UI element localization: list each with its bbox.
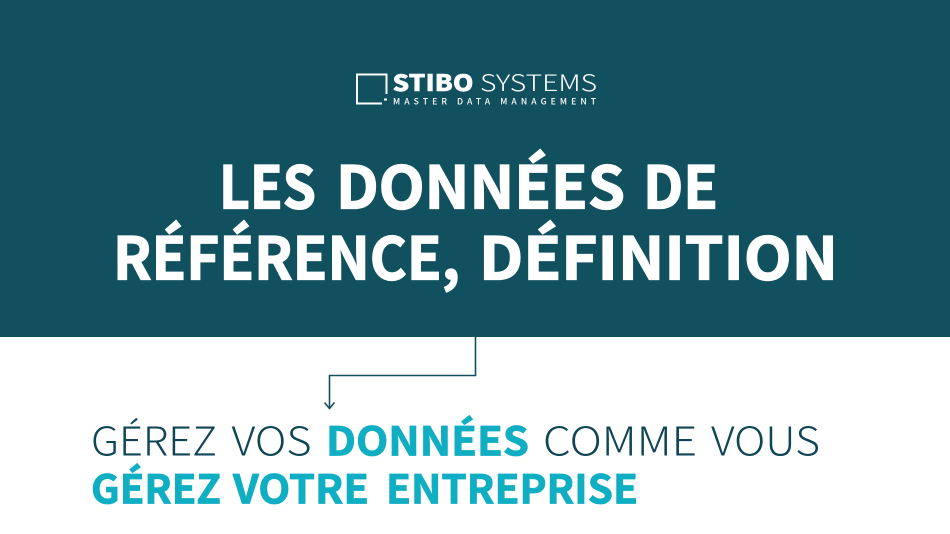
- subtitle line 1: GÉREZ: [91, 410, 217, 468]
- title: [113, 140, 838, 297]
- subtitle line 1: VOS: [232, 410, 312, 468]
- logo: Stibo Systems: [357, 66, 597, 107]
- panel: dark teal header: [0, 0, 950, 337]
- title line 1: LES: [219, 140, 316, 225]
- arrow: from header to subtitle: [324, 337, 476, 408]
- logo text: STIBO: STIBO: [392, 66, 474, 98]
- subtitle line 2: ENTREPRISE: [386, 458, 638, 516]
- subtitle line 2: VOTRE: [232, 458, 369, 516]
- logo text: SYSTEMS: SYSTEMS: [480, 66, 597, 98]
- subtitle line 2: GÉREZ: [91, 458, 221, 516]
- title line 1: [219, 140, 718, 225]
- title line 2: DÉFINITION: [479, 212, 838, 297]
- title line 1: DE: [643, 140, 718, 225]
- subtitle line 1: VOUS: [711, 410, 820, 468]
- subtitle line 1: [91, 410, 820, 468]
- logo tagline: MASTER DATA MANAGEMENT: [393, 95, 596, 107]
- title line 2: RÉFÉRENCE,: [113, 212, 460, 297]
- subtitle line 2: [91, 458, 638, 516]
- subtitle: [91, 410, 820, 516]
- title line 2: [113, 212, 838, 297]
- subtitle line 1: COMME: [543, 410, 697, 468]
- title line 1: DONNÉES: [336, 140, 625, 225]
- icon: logo square: [357, 74, 387, 104]
- subtitle line 1: DONNÉES: [326, 410, 529, 468]
